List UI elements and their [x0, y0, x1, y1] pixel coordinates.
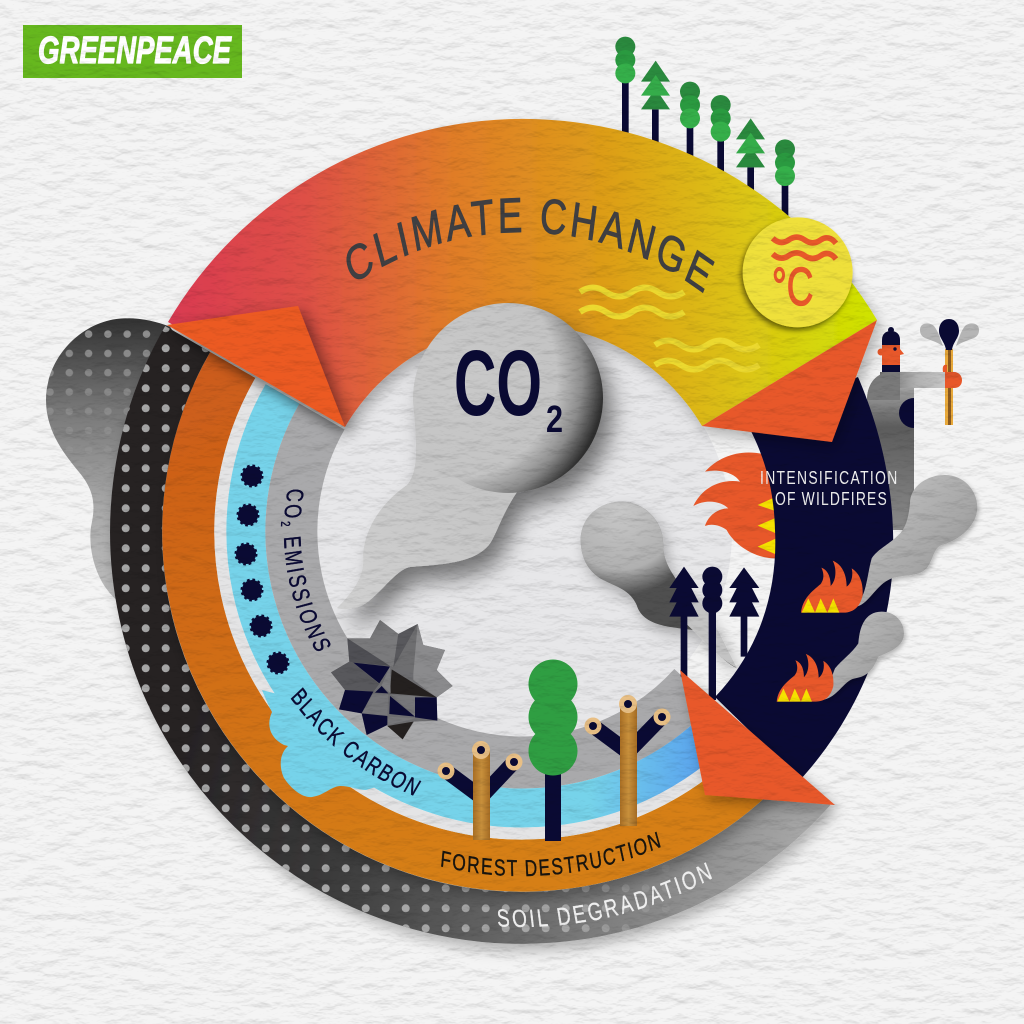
label: intensification of wildfires: [760, 468, 897, 510]
person body: [867, 372, 914, 530]
label: intensification of wildfires: OF WILDFIRES: [775, 489, 887, 510]
CO2 smoke cloud: [337, 303, 603, 609]
wave lines: [773, 237, 836, 259]
smoke from lower fire: [820, 612, 904, 700]
ring: forest destruction: [188, 365, 770, 866]
forest trees navy silhouettes: [669, 567, 759, 700]
ring: pale gap: [220, 381, 746, 834]
ring: soil degradation: [136, 339, 811, 918]
heading: climate change: CLIMATE CHANGE: [346, 198, 715, 294]
ring: black carbon: [246, 394, 727, 808]
match stick: [945, 349, 953, 425]
person arm: [880, 372, 946, 388]
icon: temperature badge: [743, 217, 853, 327]
chest badge: [899, 398, 914, 428]
arrow head: bottom right: [680, 670, 835, 805]
label: CO2 subscript: 2: [546, 399, 563, 441]
central paper disc: [312, 322, 732, 742]
smoke behind forest trees: [581, 502, 737, 668]
degrees celsius: °C: [772, 258, 813, 317]
smoke cloud dots: [46, 318, 150, 434]
arrow head: top right: [702, 320, 877, 442]
green tree centre: [528, 660, 578, 841]
top trees row: [615, 37, 795, 217]
logo: Greenpeace: [23, 25, 242, 78]
smoke cloud behind soil ring: [46, 318, 197, 600]
burnt stump left: [438, 741, 522, 840]
burnt stump right: [584, 695, 670, 826]
label: intensification of wildfires: INTENSIFICATION: [760, 468, 897, 489]
icon: black carbon particle: [331, 620, 453, 739]
big flame: [693, 452, 787, 563]
person head: [878, 327, 904, 372]
smoke from upper fire: [855, 475, 977, 607]
ring: CO2 emissions: [291, 416, 694, 762]
black carbon cloud bulge: [262, 690, 400, 797]
panel: climate change band: [168, 119, 877, 427]
black carbon particles: [236, 466, 288, 673]
label: CO2 emissions: EMISSIONS: [284, 536, 330, 652]
label: soil degradation: SOIL DEGRADATION: [498, 862, 712, 928]
match head: [939, 319, 959, 350]
match smoke: [920, 323, 979, 346]
icon: lower fire: [777, 654, 833, 702]
shoulder: [867, 372, 900, 400]
person holding burning match: [867, 319, 979, 530]
label: CO2 emissions: CO: [284, 490, 304, 518]
label: black carbon: BLACK CARBON: [290, 687, 422, 796]
arrow head: left: [167, 306, 345, 427]
label: CO2 emissions: 2: [280, 521, 290, 526]
logo: Greenpeace: GREENPEACE: [38, 30, 232, 72]
navy wildfire ring: [715, 377, 893, 780]
label: forest destruction: FOREST DESTRUCTION: [441, 832, 661, 876]
label: CO2: CO: [454, 331, 542, 435]
hand: [943, 365, 962, 388]
heat waves: [580, 288, 759, 370]
icon: upper fire: [801, 561, 863, 613]
